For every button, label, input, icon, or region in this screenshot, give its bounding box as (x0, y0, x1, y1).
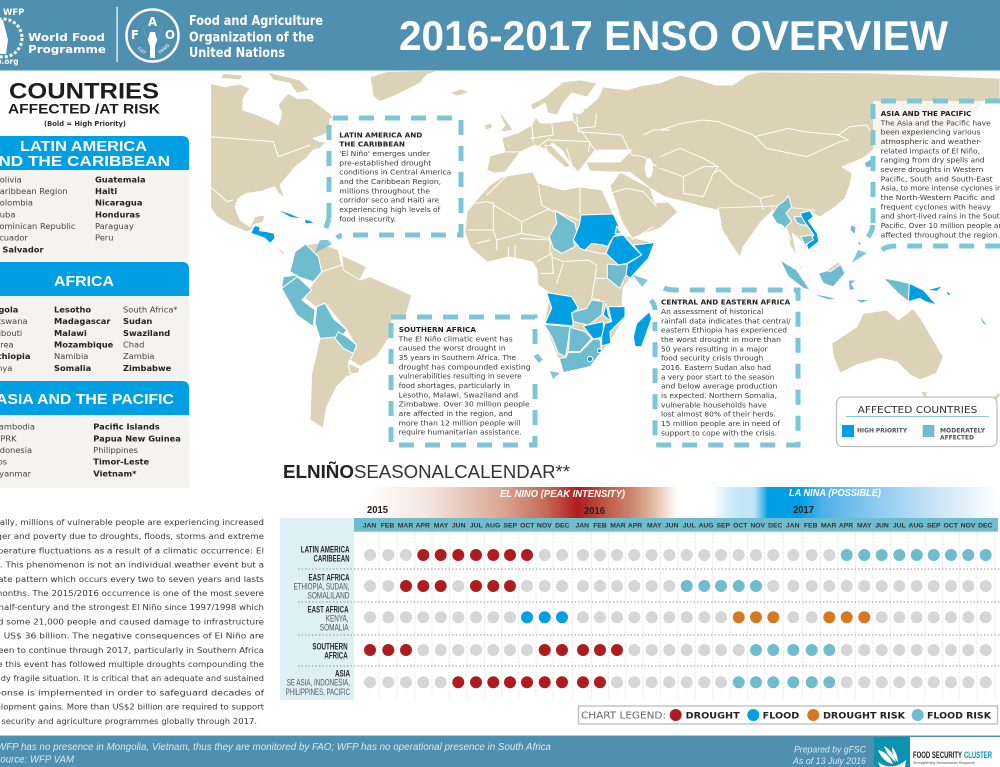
month header: AUG (485, 522, 500, 530)
row: Southern Africa dots (364, 644, 992, 656)
year labels (367, 504, 814, 517)
month header: JAN (786, 522, 800, 530)
month header: NOV (537, 522, 552, 530)
month header: APR (839, 522, 853, 530)
month header (354, 518, 998, 532)
callout: Latin America and the Caribbean: millions throughout the (339, 186, 430, 195)
month header: JUL (470, 522, 483, 530)
callout: Asia and the Pacific: Pacific, South and South-East (881, 174, 993, 183)
list: Africa: Swaziland (123, 328, 170, 338)
FAO name: Organization of the (189, 30, 314, 46)
callout: Asia and the Pacific: The Asia and the Pacific have (880, 118, 991, 127)
month header: MAY (434, 522, 449, 530)
list: Asia and the Pacific: Philippines (93, 445, 138, 455)
calendar title: SEASONALCALENDAR** (354, 462, 570, 482)
list: Africa: Zambia (123, 351, 155, 361)
month header: JUN (665, 522, 679, 530)
month header: DEC (555, 522, 570, 530)
FAO logo: FIAT (136, 46, 147, 57)
calendar title: ELNIÑO (283, 461, 354, 482)
callout: Central and Eastern Africa: a very poor start to the season (661, 372, 775, 381)
month header: OCT (733, 522, 748, 530)
callout: Asia and the Pacific: severe droughts in Western (881, 165, 984, 174)
list: Africa: Namibia (54, 351, 88, 361)
callout: Central and Eastern Africa: rainfall data indicates that central/ (661, 316, 791, 325)
month header: MAR (821, 522, 837, 530)
callout: Asia and the Pacific: frequent cyclones with heavy (881, 202, 992, 211)
WFP logo (0, 8, 106, 66)
prepared by: Prepared by gFSC (794, 745, 866, 756)
callout: Central and Eastern Africa: CENTRAL AND EASTERN AFRICA (661, 298, 791, 307)
legend: affected countries: AFFECTED COUNTRIES (858, 405, 977, 416)
month header: JUN (875, 522, 889, 530)
panel: countries at risk (0, 78, 189, 488)
list: Latin America: Paraguay (95, 221, 134, 231)
callout: Southern Africa: caused the worst drought in (399, 344, 506, 353)
world map (210, 70, 1000, 428)
FAO name: United Nations (189, 46, 285, 61)
month header: JUL (683, 522, 696, 530)
callout: Southern Africa (391, 317, 560, 445)
prepared by: As of 13 July 2016 (792, 756, 867, 767)
map: South America (282, 243, 412, 428)
month header: NOV (961, 522, 976, 530)
map: Europe and West Asia borders (468, 113, 670, 260)
row: East Africa (Kenya, Somalia) dots (364, 611, 992, 623)
FAO name (189, 14, 323, 61)
list: Latin America (0, 136, 189, 262)
callout: Southern Africa: vulnerabilities resulting in severe (399, 372, 522, 381)
list: Africa: Somalia (54, 363, 91, 373)
month header: DEC (768, 522, 783, 530)
month header: MAR (610, 522, 626, 530)
callout: Central and Eastern Africa: lost almost 80% of their herds. (661, 410, 776, 419)
chart legend: DROUGHT RISK (823, 710, 906, 722)
list: Latin America: Honduras (95, 209, 140, 219)
list: Africa: Malawi (54, 328, 87, 338)
row label column: ETHIOPIA, SUDAN, (294, 581, 350, 591)
Food Security Cluster logo (874, 737, 1000, 767)
callout: Southern Africa: require humanitarian assistance. (399, 428, 522, 437)
seasonal calendar (280, 461, 1000, 700)
list: Africa: Mozambique (54, 340, 114, 350)
chart legend: DROUGHT (686, 710, 740, 722)
year labels: 2015 (367, 504, 388, 516)
list: Africa: Sudan (123, 316, 152, 326)
row label column: SOUTHERN (312, 641, 348, 651)
list: Latin America: Peru (95, 233, 113, 243)
list: Africa: Chad (123, 340, 144, 350)
callout: Central and Eastern Africa: 50 years resulting in a major (661, 344, 769, 353)
callout: Southern Africa: drought has compounded existing (399, 362, 531, 371)
FAO logo: PANIS (157, 42, 171, 56)
row: East Africa (Ethiopia, Sudan, Somaliland) dots (364, 580, 992, 592)
callout: Latin America and the Caribbean: experiencing high levels of (339, 205, 441, 214)
row label column: ASIA (335, 669, 350, 679)
chart legend: FLOOD (763, 710, 800, 722)
list: Africa: Lesotho (54, 304, 91, 314)
row label column: SE ASIA, INDONESIA, (287, 678, 350, 688)
callout: Southern Africa: are affected in the region, and (399, 409, 513, 418)
month header: FEB (381, 522, 394, 530)
La Nina intensity band: LA NINA (POSSIBLE) (789, 488, 882, 499)
list: Africa: AFRICA (54, 273, 114, 290)
row label column: EAST AFRICA (308, 572, 350, 582)
logo divider (116, 7, 118, 62)
row label column: LATIN AMERICA (301, 545, 350, 555)
callout: Asia and the Pacific: related impacts of El Niño, (881, 146, 980, 155)
footer bar (0, 735, 1000, 767)
calendar title (283, 461, 570, 482)
callout: Asia and the Pacific: Asia, to more intense cyclones in (881, 184, 1000, 193)
callout: Central and Eastern Africa: food security crisis through (661, 354, 764, 363)
footnotes (0, 742, 551, 766)
month header: SEP (716, 522, 731, 530)
list: Africa: South Africa* (123, 304, 178, 314)
panel heading (8, 78, 160, 128)
callout: Asia and the Pacific: ranging from dry spells and (881, 156, 985, 165)
month header: OCT (520, 522, 535, 530)
panel heading: (Bold = High Priority) (44, 120, 126, 128)
WFP logo: WFP (3, 8, 24, 18)
month header: FEB (593, 522, 607, 530)
month header: OCT (944, 522, 959, 530)
callout: Southern Africa: more than 12 million people will (399, 418, 520, 427)
callout: Central and Eastern Africa: and below average production (661, 382, 778, 391)
map: Africa highlighted countries (537, 211, 654, 373)
row label column: PHILIPPINES, PACIFIC (286, 687, 350, 697)
callout: Latin America and the Caribbean: THE CARIBBEAN (339, 140, 405, 149)
chart legend: CHART LEGEND: (581, 710, 666, 721)
list: Latin America: Guatemala (95, 174, 146, 184)
list: Africa (0, 262, 189, 381)
month header: AUG (698, 522, 714, 530)
intro text block (0, 517, 265, 726)
row: Asia dots (364, 676, 992, 688)
month header: SEP (503, 522, 518, 530)
callout: Asia and the Pacific: ASIA AND THE PACIFIC (881, 109, 971, 118)
callout: Latin America and the Caribbean: 'El Niño' emerges under (339, 149, 431, 158)
month header: JAN (363, 522, 376, 530)
callout: Southern Africa: SOUTHERN AFRICA (399, 325, 476, 334)
callout: Latin America and the Caribbean: food insecurity. (339, 214, 396, 223)
row label column: AFRICA (324, 650, 348, 660)
callout: Asia and the Pacific: been experiencing various (881, 128, 981, 137)
callout: Asia and the Pacific: atmospheric and weather- (881, 137, 982, 146)
map: North America (210, 70, 440, 254)
callout: Asia and the Pacific: affected throughout the region. (881, 230, 1000, 239)
callout: Central and Eastern Africa: is expected. Northern Somalia, (661, 391, 777, 400)
title: 2016-2017 ENSO OVERVIEW (399, 12, 948, 59)
month header: AUG (908, 522, 924, 530)
callout: Central and Eastern Africa: 15 million people are in need of (661, 419, 780, 428)
legend: affected countries (836, 397, 997, 446)
callout: Central and Eastern Africa: support to cope with the crisis. (661, 428, 777, 437)
WFP logo: World Food (28, 31, 105, 44)
legend: affected countries: HIGH PRIORITY (857, 428, 907, 435)
FAO name: Food and Agriculture (189, 14, 323, 29)
row label column: SOMALIA (320, 623, 348, 633)
month header: MAY (647, 522, 662, 530)
map: inland seas (572, 106, 653, 178)
panel heading: COUNTRIES (9, 78, 159, 104)
month header: DEC (978, 522, 993, 530)
month header: APR (416, 522, 430, 530)
list: Latin America: Nicaragua (95, 198, 142, 208)
month header: FEB (804, 522, 818, 530)
month header: JAN (575, 522, 589, 530)
callout: Latin America and the Caribbean: and the Caribbean Region, (339, 177, 441, 186)
La Nina intensity band (713, 487, 1000, 518)
WFP logo: Programme (28, 43, 106, 56)
callout: Latin America and the Caribbean: conditions in Central America (339, 168, 451, 177)
callout: Southern Africa: Zimbabwe. Over 30 million people (399, 400, 530, 409)
month header: SEP (927, 522, 941, 530)
callout: Southern Africa: The El Niño climatic event has (398, 334, 513, 343)
callout: Central and Eastern Africa (633, 275, 800, 446)
callout: Southern Africa: food shortages, particularly in (399, 381, 510, 390)
FAO logo: A (148, 15, 158, 29)
list: Asia and the Pacific: ASIA AND THE PACIFIC (0, 391, 174, 408)
Food Security Cluster logo: Strengthening Humanitarian Response (913, 761, 975, 765)
Food Security Cluster logo: FOOD SECURITY (913, 750, 962, 760)
month header: JUL (893, 522, 906, 530)
map: Africa and Eurasia base (450, 72, 1000, 373)
list: Asia and the Pacific: Vietnam* (93, 468, 137, 478)
row: Latin America dots (364, 549, 992, 561)
callout: Latin America and the Caribbean: corridor seco and Haiti are (339, 196, 440, 205)
callout: Central and Eastern Africa: 2016. Eastern Sudan also had (661, 363, 771, 372)
header bar (0, 0, 1000, 71)
chart legend (578, 706, 998, 724)
list: Latin America: LATIN AMERICA (20, 138, 147, 155)
footnotes: *WFP has no presence in Mongolia, Vietnam, thus they are monitored by FAO; WFP has no operational presence in South Africa (0, 742, 551, 753)
month header: APR (628, 522, 642, 530)
callout: Central and Eastern Africa: vulnerable households have (661, 400, 767, 409)
FAO logo: O (165, 28, 175, 42)
list: Africa: Madagascar (54, 316, 111, 326)
callout: Southern Africa: Lesotho, Malawi, Swaziland and (399, 390, 518, 399)
callout: Southern Africa: 35 years in Southern Africa. The (399, 353, 516, 362)
callout: Latin America and the Caribbean (315, 118, 461, 253)
legend: affected countries: AFFECTED (940, 435, 974, 442)
El Nino intensity band: EL NINO (PEAK INTENSITY) (500, 489, 626, 500)
year labels: 2016 (584, 505, 605, 517)
year labels: 2017 (793, 504, 814, 516)
FAO logo (126, 10, 178, 62)
callout: Central and Eastern Africa: eastern Ethiopia has experienced (661, 326, 787, 335)
legend: affected countries: MODERATELY (940, 427, 985, 434)
callout: Asia and the Pacific (852, 101, 1000, 263)
row label column: SOMALILAND (308, 590, 350, 600)
row label column: KENYA, (326, 614, 348, 624)
month header: JUN (452, 522, 466, 530)
callout: Central and Eastern Africa: An assessment of historical (661, 307, 763, 316)
month header: MAR (398, 522, 413, 530)
list: Asia and the Pacific: Timor-Leste (93, 457, 150, 467)
list: Latin America: Haiti (95, 186, 117, 196)
panel heading: AFFECTED /AT RISK (8, 100, 160, 116)
month header: NOV (750, 522, 766, 530)
list: Asia and the Pacific: Pacific Islands (93, 422, 160, 432)
month header: MAY (857, 522, 872, 530)
map: Asia borders and highlighted countries (660, 120, 877, 250)
list: Asia and the Pacific: Papua New Guinea (93, 433, 181, 443)
El Nino intensity band (365, 487, 678, 518)
row label column: CARIBEEAN (314, 554, 350, 564)
callout: Latin America and the Caribbean: LATIN AMERICA AND (339, 130, 422, 139)
chart legend: FLOOD RISK (927, 710, 992, 722)
row label column (280, 518, 354, 700)
prepared by (792, 745, 867, 767)
callout: Central and Eastern Africa: the worst drought in more than (661, 335, 781, 344)
map: Indonesia, Pacific and Australia (780, 225, 1000, 407)
callout: Latin America and the Caribbean: pre-established drought (339, 158, 431, 167)
list: Africa: Zimbabwe (123, 363, 172, 373)
row label column: EAST AFRICA (308, 605, 349, 615)
list: Asia and the Pacific (0, 381, 189, 488)
FAO logo: F (131, 28, 139, 42)
callout: Asia and the Pacific: the North-Western Pacific and (881, 193, 995, 202)
